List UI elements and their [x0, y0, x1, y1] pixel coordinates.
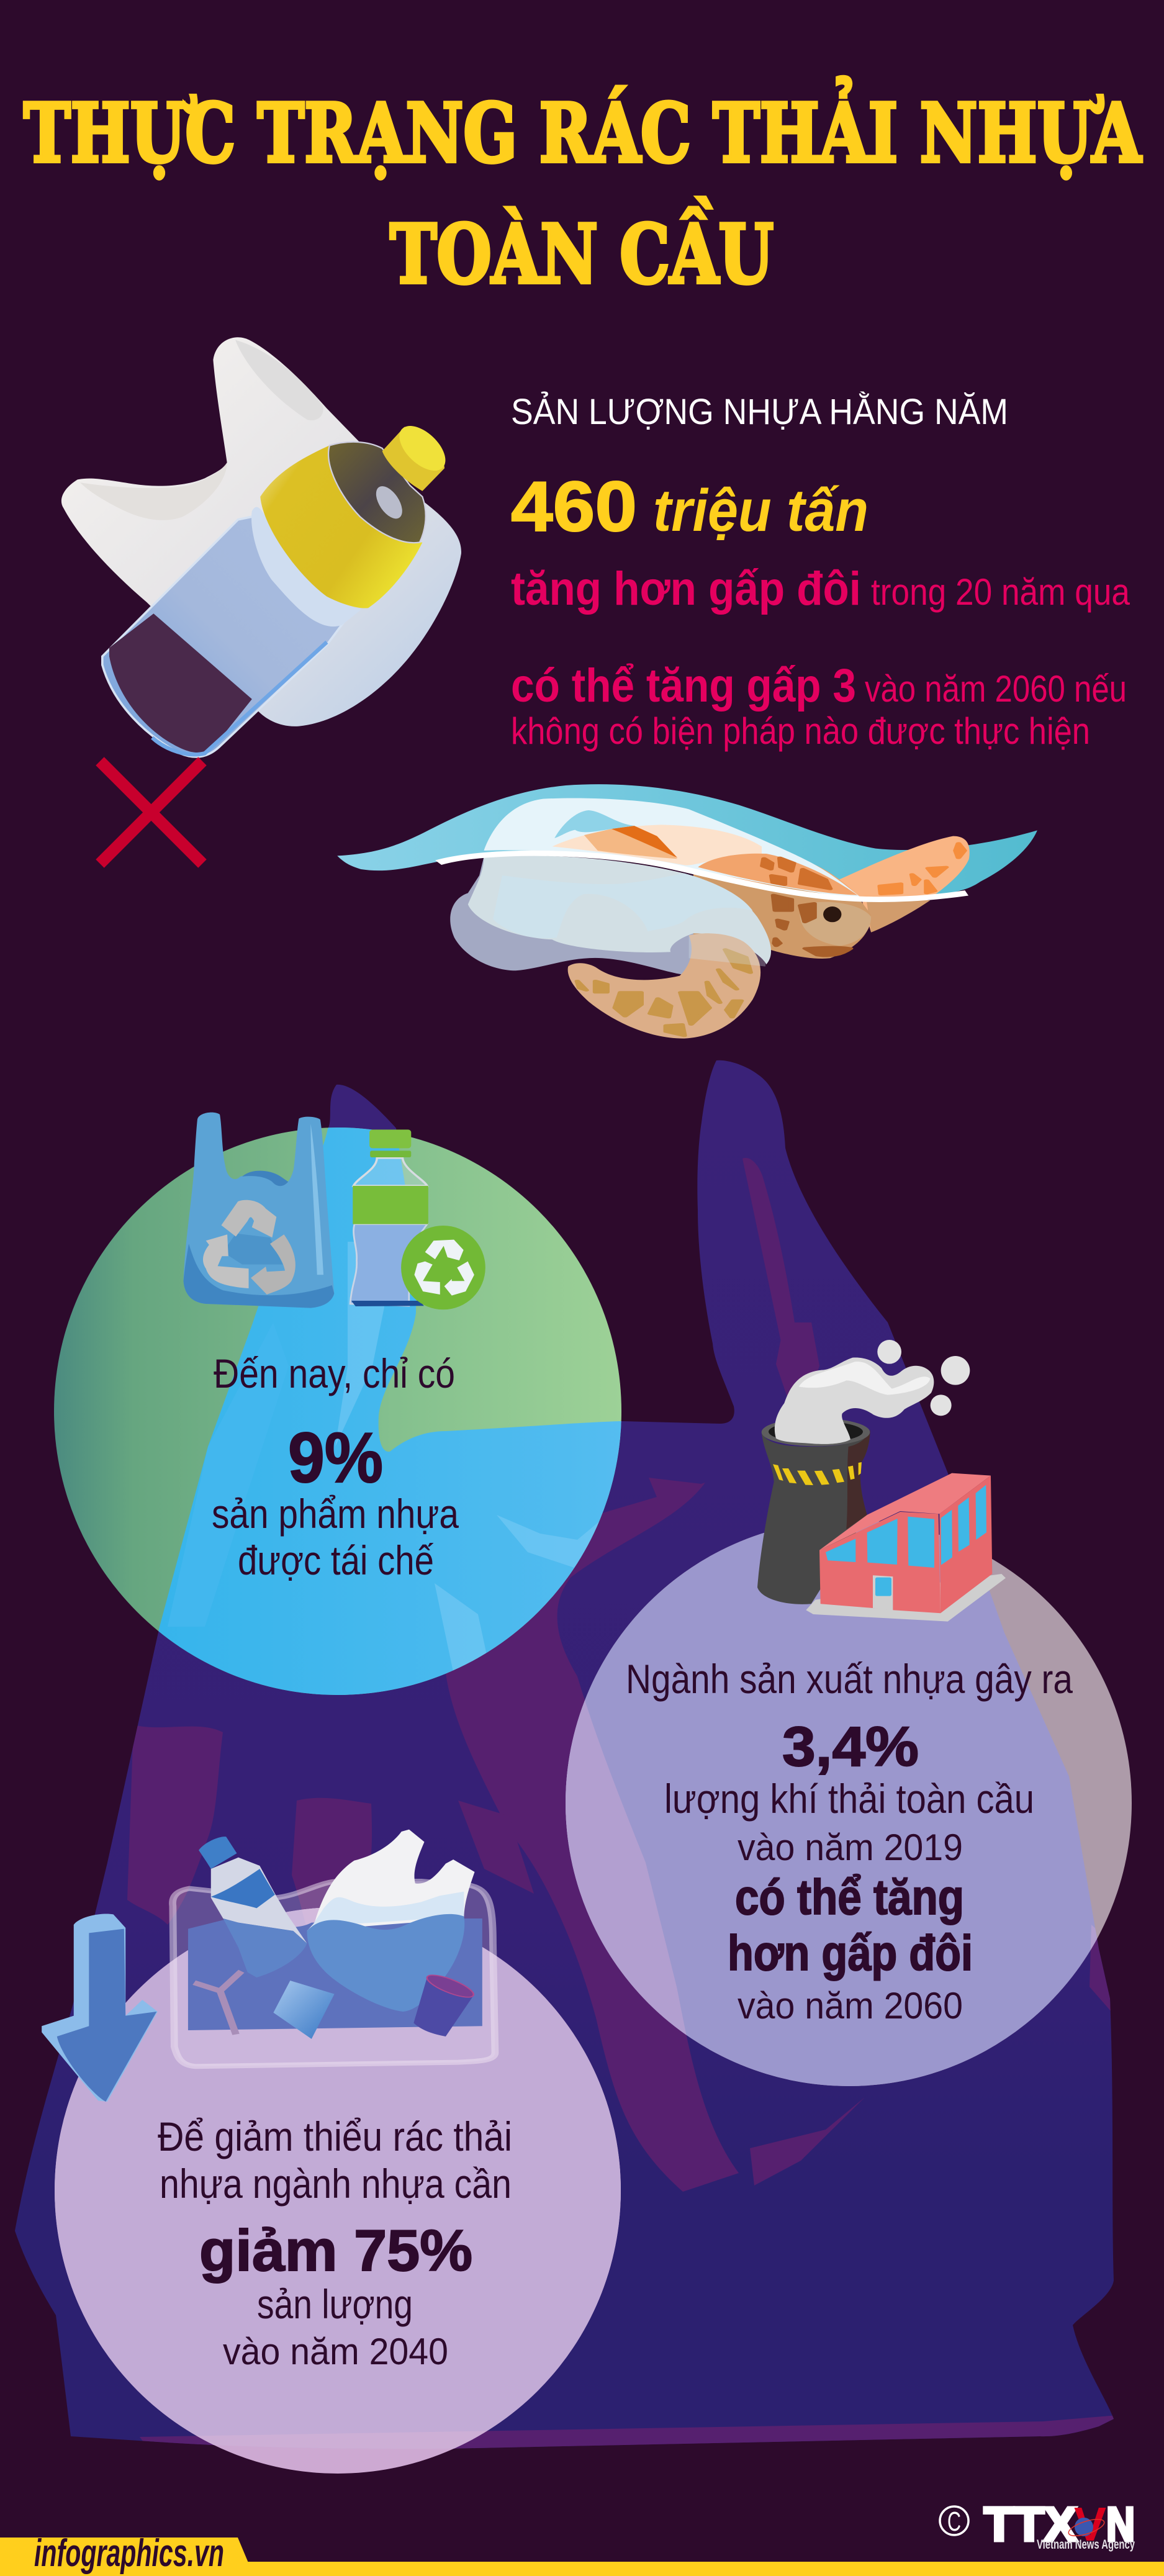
text block: reduce 75%: Để giảm thiểu rác thải	[158, 2113, 512, 2159]
icon: blue plastic bag	[183, 1113, 334, 1308]
logo: copyright and TTXVN: C	[947, 2506, 961, 2537]
icons: recycle bag and bottle	[183, 1113, 485, 1309]
text block: reduce 75%: giảm 75%	[199, 2218, 472, 2283]
logo: copyright and TTXVN: TTX	[984, 2498, 1077, 2551]
icon: blue crushed bottle	[199, 1837, 307, 1977]
footer bar	[0, 2532, 1164, 2576]
text block: 3.4% emissions: Ngành sản xuất nhựa gây ra	[626, 1656, 1073, 1702]
text block: annual plastic production: triệu tấn	[653, 477, 868, 544]
logo: copyright and TTXVN	[940, 2498, 1135, 2552]
text block: reduce 75%	[158, 2113, 512, 2372]
footer source label: infographics.vn	[34, 2532, 224, 2575]
text block: annual plastic production	[511, 392, 1130, 752]
text block: annual plastic production: có thể tăng gấp 3	[511, 659, 856, 712]
text block: 3.4% emissions: vào năm 2019	[738, 1827, 963, 1868]
text block: 3.4% emissions: lượng khí thải toàn cầu	[664, 1776, 1034, 1822]
illustration: plastic bottle on white stand	[61, 337, 461, 757]
text block: annual plastic production: trong 20 năm qua	[871, 571, 1130, 613]
panel: reduce production circle	[55, 1908, 621, 2474]
text block: 9% recycled: sản phẩm nhựa	[212, 1491, 459, 1537]
icon: factory and chimney	[757, 1340, 1006, 1622]
illustration: plastic waste in a box with down arrow	[42, 1830, 495, 2102]
logo: copyright and TTXVN: V	[1074, 2498, 1106, 2551]
text block: 9% recycled: được tái chế	[238, 1537, 434, 1583]
text block: 3.4% emissions	[626, 1656, 1073, 2027]
icon: plastic cup	[413, 1971, 478, 2036]
title	[24, 77, 1142, 302]
text block: 9% recycled: Đến nay, chỉ có	[214, 1350, 455, 1396]
text block: reduce 75%: sản lượng	[257, 2281, 413, 2327]
icon: white bag	[307, 1830, 475, 2012]
illustration: turtle trapped in plastic bag	[337, 784, 1037, 1039]
text block: 3.4% emissions: vào năm 2060	[738, 1985, 963, 2027]
box	[173, 1881, 495, 2066]
text block: annual plastic production: không có biện pháp nào được thực hiện	[511, 710, 1090, 752]
text block: annual plastic production: tăng hơn gấp đôi	[511, 563, 861, 615]
text block: reduce 75%: nhựa ngành nhựa cần	[160, 2161, 512, 2207]
icon: plastic cube	[273, 1981, 335, 2039]
panel: recycling circle	[54, 1128, 621, 1695]
text block: annual plastic production: 460	[511, 468, 637, 546]
panel: emissions circle	[566, 1521, 1132, 2086]
plastic bag background shape	[15, 1060, 1117, 2452]
icon: recycle badge	[401, 1226, 485, 1309]
text block: 9% recycled: 9%	[288, 1419, 383, 1498]
text block: 3.4% emissions: có thể tăng	[735, 1869, 964, 1925]
text block: annual plastic production: SẢN LƯỢNG NHỰA HẰNG NĂM	[511, 392, 1008, 432]
icon: down arrow	[42, 1914, 158, 2102]
icon: plastic fork piece	[194, 1971, 241, 2035]
text block: 3.4% emissions: 3,4%	[782, 1716, 919, 1778]
logo: copyright and TTXVN: N	[1106, 2498, 1135, 2551]
title: TOÀN CẦU	[390, 197, 774, 302]
icon: green bottle	[350, 1129, 428, 1306]
text block: 9% recycled	[212, 1350, 459, 1583]
text block: 3.4% emissions: hơn gấp đôi	[728, 1925, 973, 1981]
text block: reduce 75%: vào năm 2040	[223, 2331, 448, 2372]
icon: red cross	[100, 761, 202, 864]
